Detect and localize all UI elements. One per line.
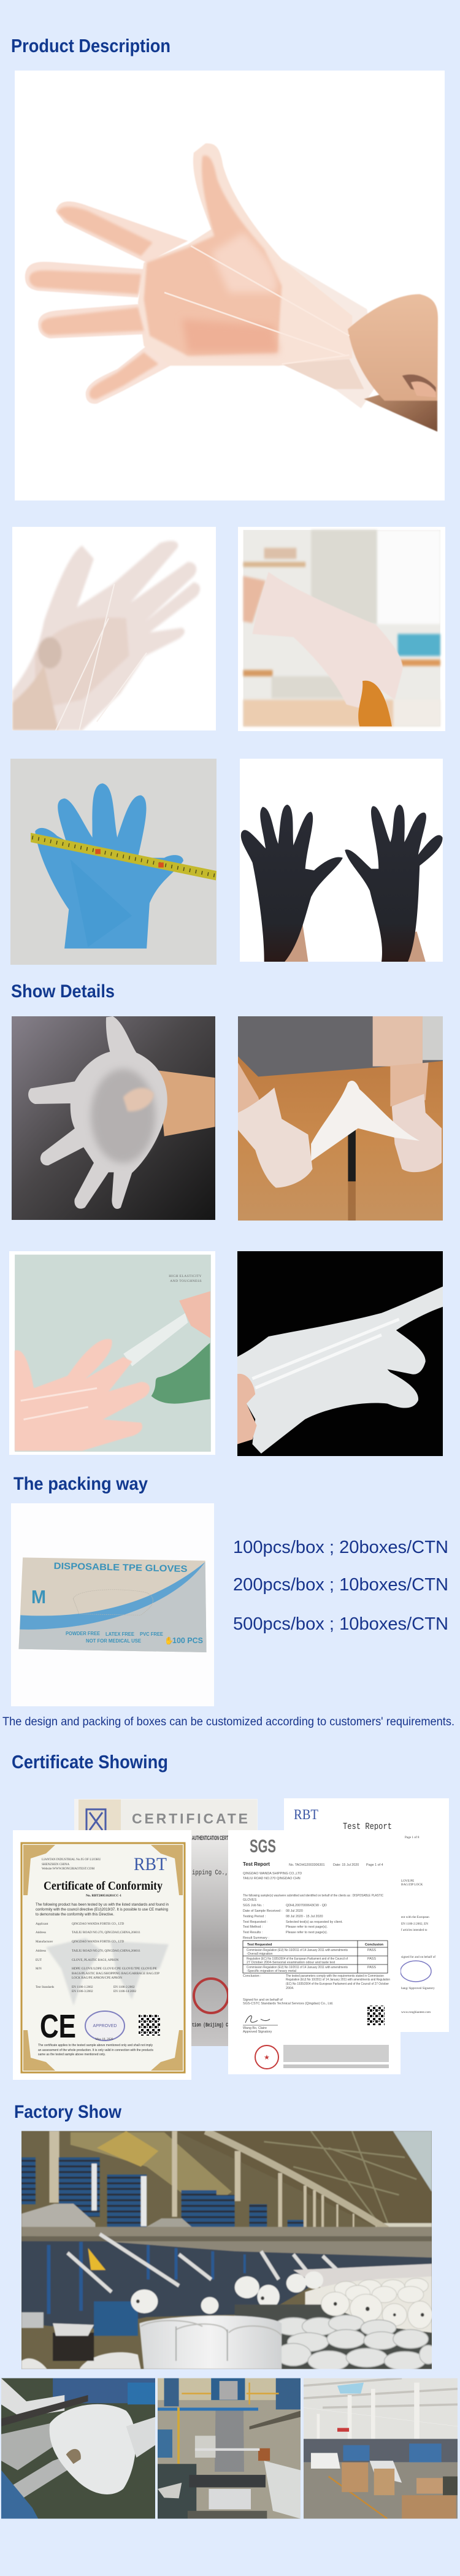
packing specifications: 100pcs/box ; 20boxes/CTN xyxy=(233,1538,448,1557)
box labels: M xyxy=(31,1586,46,1608)
panel: SGS test report sheet: Test Requested : xyxy=(243,1920,267,1924)
panel: SGS test report sheet: SGS Job No. : xyxy=(243,1904,264,1907)
results table: 27 October 2004-Sensorial examination odour and taste test xyxy=(247,1961,335,1965)
box labels: DISPOSABLE TPE GLOVES xyxy=(53,1561,188,1574)
panel: SGS test report sheet: The following sample(s) was/were submitted and identified on behalf of the clients as : DISPOSABLE PLASTIC xyxy=(243,1894,383,1898)
packing specifications: 200pcs/box ; 10boxes/CTN xyxy=(233,1575,448,1595)
panel: SGS test report sheet xyxy=(228,1830,401,2074)
gold corner ornaments xyxy=(23,1845,183,2071)
panel: certificate of conformity: Address xyxy=(36,1949,46,1953)
panel: RBT test report sheet: BAG/ZIP LOCK xyxy=(401,1883,423,1887)
panel: SGS test report sheet: Wang Bo, Claire xyxy=(243,2026,267,2030)
silver hoods xyxy=(21,2204,96,2242)
approval stamp: APPROVED xyxy=(93,2024,117,2028)
panel: stretched glove on black photo xyxy=(237,1251,443,1456)
packing specifications: 500pcs/box ; 10boxes/CTN xyxy=(233,1614,448,1634)
panel: SGS test report sheet: No. TAOHG2003306301 xyxy=(289,1863,325,1867)
results table: Commission Regulation (EU) No 10/2011 of 14 January 2011 with amendments xyxy=(247,1949,348,1952)
panel: certificate of conformity: The certificate applies to the tested sample above mentioned only and shall not imply xyxy=(38,2044,153,2047)
panel: certificate of conformity: EN 1186-2:2002 xyxy=(113,1985,135,1989)
panel: RBT test report sheet: hang/ Approved Signatory xyxy=(401,1987,435,1990)
panel: glove box xyxy=(11,1503,214,1706)
CE mark: CE xyxy=(40,2008,76,2045)
label: high elasticity and toughness: HIGH ELASTICITY xyxy=(169,1275,202,1278)
panel: SGS test report sheet: 08 Jul 2020 - 15 Jul 2020 xyxy=(286,1915,323,1919)
panel: certificate of conformity: EN 1186-3:2002 xyxy=(72,1990,93,1993)
box labels: ✋ xyxy=(164,1636,174,1645)
results table: PASS xyxy=(367,1957,376,1961)
panel: RBT test report sheet: LOVE/PE xyxy=(401,1879,414,1883)
panel: main factory floor photo xyxy=(21,2131,432,2369)
results table: -Overall migration xyxy=(247,1952,273,1956)
heading: Show Details: Show Details xyxy=(11,981,115,1002)
panel: certificate of conformity: SHENZHEN CHINA xyxy=(42,1863,69,1866)
panel: SGS test report sheet: QDHL2007000643CW - QD xyxy=(286,1904,327,1907)
panel: certificate back sheet: tion (Beijing) C xyxy=(192,2022,228,2028)
panel: SGS test report sheet: Test Method : xyxy=(243,1925,263,1929)
red stamp and small print xyxy=(255,2045,389,2069)
panel: glove handling fried chicken photo xyxy=(238,527,445,731)
panel: certificate of conformity: EUT xyxy=(36,1958,42,1962)
panel: film roll photo xyxy=(1,2379,155,2518)
panel: certificate of conformity: same as the tested sample above mentioned only. xyxy=(38,2053,105,2057)
box labels xyxy=(31,1561,203,1645)
front rolls xyxy=(274,2315,437,2371)
box labels: POWDER FREE xyxy=(66,1631,101,1636)
floor xyxy=(235,2304,432,2369)
panel: SGS test report sheet: SGS-CSTC Standards Technical Services (Qingdao) Co., Ltd. xyxy=(243,2002,333,2006)
logo mark xyxy=(86,1809,105,1831)
panel: RBT test report sheet: Test Report xyxy=(343,1822,392,1832)
heading: Product Description: Product Description xyxy=(11,35,171,56)
results table xyxy=(243,1941,388,1973)
panel: certificate of conformity: RBT xyxy=(134,1854,167,1874)
approval stamp xyxy=(85,2011,125,2041)
panel: SGS test report sheet: GLOVES xyxy=(243,1898,257,1902)
box labels: LATEX FREE xyxy=(105,1631,135,1637)
panel: blown film machine photo xyxy=(158,2379,301,2518)
panel: SGS test report sheet: Conclusion : xyxy=(243,1974,261,1978)
panel: RBT test report sheet: Page 1 of 8 xyxy=(405,1835,420,1839)
columns xyxy=(55,2131,353,2233)
panel: SGS test report sheet: Date: 15 Jul 2020 xyxy=(333,1863,359,1867)
panel: certificate of conformity: HDPE GLOVE/LDPE GLOVE/CPE GLOVE/TPE GLOVE/PE xyxy=(72,1967,157,1971)
pipes xyxy=(21,2227,432,2236)
panel: SGS test report sheet: Date of Sample Received : xyxy=(243,1909,282,1913)
panel: certificate back sheet: AUTHENTICATION CERT xyxy=(192,1835,228,1842)
skin seen through glove xyxy=(29,156,282,399)
panel: SGS test report sheet: The tested parameters comply with the requirements stated in Commission xyxy=(286,1974,384,1978)
panel: certificate of conformity: LIANTAN INDUSTRIAL No.95 OF LUOHU xyxy=(42,1858,101,1861)
panel: SGS test report sheet: Regulation (EU) No 10/2011 of 14 January 2011 with amendments and Regulation xyxy=(286,1978,390,1982)
results table: Regulation (EC) No 1935/2004 of the European Parliament and of the Council of xyxy=(247,1957,348,1961)
heading: The packing way: The packing way xyxy=(13,1474,148,1494)
panel: certificate of conformity: LOCK BAG/PE APRON/CPE APRON xyxy=(72,1976,122,1980)
panel: RBT test report sheet: www.rongbiaotest.com xyxy=(401,2011,431,2014)
panel: RBT test report sheet: signed for and on behalf of xyxy=(401,1955,435,1959)
panel: RBT test report sheet: RBT xyxy=(294,1807,318,1822)
panel: certificate of conformity: Certificate of Conformity xyxy=(44,1879,163,1893)
results table: PASS xyxy=(367,1949,376,1952)
panel: certificate of conformity: No. RBT200516201CC-1 xyxy=(86,1894,121,1898)
packing specifications xyxy=(233,1538,448,1634)
panel: RBT test report sheet: EN 1186-2:2002, EN xyxy=(401,1922,428,1926)
box illustration xyxy=(18,1557,207,1652)
panel: certificate of conformity: Manufacturer xyxy=(36,1939,53,1944)
panel: black gloves photo xyxy=(240,759,443,962)
signature xyxy=(245,2015,270,2023)
right roll rows xyxy=(321,2278,432,2329)
panel: certificate of conformity: QINGDAO WANDA FORTIS CO., LTD xyxy=(72,1940,125,1944)
lower machinery band xyxy=(21,2236,432,2329)
panel: RBT test report sheet: ent with the European xyxy=(401,1915,429,1919)
signature stamp xyxy=(401,1961,431,1982)
QR code xyxy=(139,2015,160,2036)
panel: certificate of conformity: Address xyxy=(36,1931,46,1934)
panel: certificate of conformity: Test Standards xyxy=(36,1985,54,1989)
panel: SGS test report sheet: Signed for and on behalf of xyxy=(243,1998,283,2002)
panel: certificate of conformity: TAILIU ROAD NO.270, QINGDAO,CHINA,266011 xyxy=(72,1931,140,1934)
panel: certificate back sheet: CERTIFICATE xyxy=(132,1811,248,1827)
panel: SGS test report sheet: Result Summary : xyxy=(243,1936,269,1940)
panel: certificate of conformity: Applicant xyxy=(36,1922,48,1926)
panel: SGS test report sheet: Please refer to next page(s). xyxy=(286,1925,328,1929)
QR code xyxy=(367,2006,385,2025)
label: high elasticity and toughness xyxy=(169,1275,202,1283)
panel: translucent glove photo xyxy=(12,527,216,730)
approval stamp: May 18, 2020 xyxy=(96,2037,113,2041)
panel: certificate of conformity: an assessment of the whole production. It is only valid in connection with the products xyxy=(38,2049,153,2052)
upper blue machines xyxy=(21,2157,304,2231)
ceiling xyxy=(176,2131,432,2233)
heading: Certificate Showing: Certificate Showing xyxy=(12,1751,168,1773)
results table: Test Requested xyxy=(247,1943,272,1947)
panel: RBT test report sheet xyxy=(284,1798,449,2032)
results table: Commission Regulation (EU) No 10/2011 of 14 January 2011 with amendments xyxy=(247,1966,348,1969)
panel: SGS test report sheet: SGS xyxy=(250,1836,276,1857)
panel: certificate of conformity: BAGS/PLASTIC BAG/SHOPPING BAG/GARBAGE BAG/ZIP xyxy=(72,1972,159,1976)
panel: certificate of conformity: to demonstrate the conformity with this Directive. xyxy=(36,1912,114,1917)
panel: SGS test report sheet: 08 Jul 2020 xyxy=(286,1909,303,1913)
panel: certificate of conformity: EN 1186-14:2002 xyxy=(113,1990,137,1993)
panel: SGS test report sheet: Please refer to next page(s). xyxy=(286,1931,328,1934)
panel: inflated glove photo xyxy=(12,1016,215,1220)
panel: certificate of conformity: M/N xyxy=(36,1967,42,1971)
panel: main glove photo xyxy=(15,71,445,500)
box labels: 100 PCS xyxy=(172,1636,203,1645)
box labels: PVC FREE xyxy=(140,1631,164,1637)
panel: certificate of conformity: EN 1186-1:2002 xyxy=(72,1985,93,1989)
panel: warehouse packing photo xyxy=(304,2379,458,2518)
panel: elasticity and toughness photo xyxy=(9,1251,215,1455)
label: high elasticity and toughness: AND TOUGHNESS xyxy=(170,1279,202,1283)
background rolls xyxy=(131,2271,323,2314)
panel: certificate of conformity xyxy=(13,1830,191,2080)
world map watermark xyxy=(46,1938,169,2006)
panel: certificate of conformity: TAILIU ROAD NO.270, QINGDAO,CHINA,266011 xyxy=(72,1949,140,1953)
results table: -Specific migration of heavy metal xyxy=(247,1969,296,1973)
heading: Factory Show: Factory Show xyxy=(14,2102,122,2122)
panel: SGS test report sheet: QINGDAO WANDA SHIPPING CO.,LTD xyxy=(243,1872,302,1876)
results table: PASS xyxy=(367,1966,376,1969)
panel: certificate of conformity: GLOVE, PLASTIC BAGS, APRON xyxy=(72,1958,118,1962)
panel: SGS test report sheet: Test Results : xyxy=(243,1931,263,1934)
panel: SGS test report sheet: Page 1 of 4 xyxy=(366,1863,383,1867)
panel: SGS test report sheet: 2004. xyxy=(286,1987,294,1990)
red stamp and small print: ★ xyxy=(264,2054,270,2061)
panel: glove stretched over pole photo xyxy=(238,1016,443,1221)
panel: blue glove with measuring tape photo xyxy=(10,759,217,965)
panel: RBT test report sheet: f articles intended to xyxy=(401,1928,427,1932)
panel: SGS test report sheet: Selected test(s) as requested by client. xyxy=(286,1920,343,1924)
panel: certificate back sheet xyxy=(74,1799,258,2046)
red stamp xyxy=(194,1979,228,2013)
panel: SGS test report sheet: (EC) No 1935/2004 of the European Parliament and of the Council of 27 October xyxy=(286,1982,389,1986)
panel: certificate back sheet: ipping Co., xyxy=(192,1869,228,1877)
panel: SGS test report sheet: TAILIU ROAD NO.270 QINGDAO CHN xyxy=(243,1877,301,1880)
results table: Conclusion xyxy=(365,1943,384,1947)
panel: SGS test report sheet: Approved Signatory xyxy=(243,2030,272,2034)
panel: certificate of conformity: QINGDAO WANDA FORTIS CO., LTD xyxy=(72,1922,125,1926)
panel: certificate of conformity: conformity with the council directive (EU)2019/37. It is possible to use CE marking xyxy=(36,1907,169,1912)
panel: certificate of conformity: Website:WWW.RONGBIAOTEST.COM xyxy=(42,1867,94,1871)
panel: SGS test report sheet: Test Report xyxy=(243,1861,270,1867)
box labels: NOT FOR MEDICAL USE xyxy=(86,1638,142,1644)
panel: certificate of conformity: The following product has been tested by us with the listed standards and found in xyxy=(36,1903,169,1907)
panel: SGS test report sheet: Testing Period : xyxy=(243,1915,266,1919)
